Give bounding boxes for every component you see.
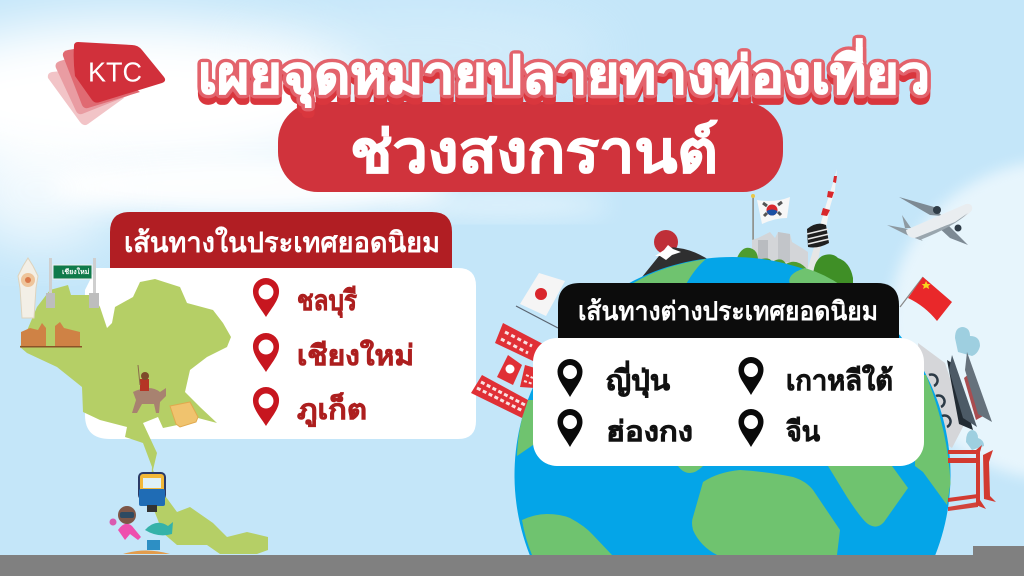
- international header: เส้นทางต่างประเทศยอดนิยม: [578, 296, 878, 326]
- logo text: KTC: [88, 56, 142, 88]
- title: เผยจุดหมายปลายทางท่องเที่ยว: [198, 46, 930, 115]
- label: Chiang Mai: เชียงใหม่: [297, 339, 414, 371]
- globe: [514, 257, 950, 555]
- domestic white card: [85, 268, 476, 439]
- landmark: N Seoul Tower: [806, 169, 853, 284]
- international white card: [533, 338, 924, 466]
- icon: Chiang Mai lantern tower: [18, 258, 38, 318]
- ground strip: [0, 546, 1024, 576]
- flag: China: [900, 277, 952, 321]
- icon: diver and sea life: [110, 506, 173, 554]
- label: Japan: ญี่ปุ่น: [606, 360, 670, 398]
- label: Hong Kong: ฮ่องกง: [606, 416, 693, 447]
- icon: black pin: [738, 357, 764, 395]
- panel: international routes: [533, 283, 924, 466]
- flag: South Korea: [751, 194, 790, 246]
- panel: domestic routes: [85, 212, 476, 439]
- flag: Japan: [516, 273, 565, 328]
- arches on wall: [929, 374, 951, 427]
- landmark: Korean palace: [947, 327, 992, 450]
- icon: Chiang Mai sign: [46, 258, 99, 308]
- icon: brick wall gate: [20, 322, 82, 348]
- icon: black pin: [557, 409, 583, 447]
- map of Thailand: [18, 258, 268, 554]
- domestic header: [110, 212, 452, 268]
- icon: red pin: [253, 333, 279, 372]
- icon: ancient temple tile: [170, 402, 198, 427]
- icon: tuk tuk: [139, 473, 165, 512]
- wall behind globe: [918, 343, 965, 448]
- logo card: [74, 42, 165, 103]
- icon: Chiang Mai sign: เชียงใหม่: [62, 267, 90, 276]
- subtitle pill: [278, 102, 783, 192]
- globe continents: [517, 259, 950, 555]
- icon: red pin: [253, 278, 279, 317]
- icon: black pin: [557, 359, 583, 397]
- landmark: Seoul skyline: [737, 232, 808, 274]
- pin list: domestic: [253, 278, 414, 427]
- landmark: Mount Fuji: [638, 230, 712, 284]
- label: China: จีน: [785, 416, 820, 447]
- icon: airplane: [887, 197, 972, 245]
- domestic header: เส้นทางในประเทศยอดนิยม: [124, 226, 440, 258]
- label: Phuket: ภูเก็ต: [297, 392, 367, 427]
- landmark: red torii gate: [948, 445, 996, 511]
- label: Chonburi: ชลบุรี: [297, 285, 357, 318]
- label: South Korea: เกาหลีใต้: [786, 364, 893, 396]
- logo: KTC: [48, 42, 165, 125]
- international header: [558, 283, 899, 338]
- icon: red pin: [253, 387, 279, 426]
- icon: farmer on buffalo: [132, 365, 166, 413]
- landmark: Hong Kong buildings and flag: [471, 323, 545, 418]
- icon: black pin: [738, 409, 764, 447]
- subtitle text: ช่วงสงกรานต์: [350, 119, 718, 185]
- title: เผยจุดหมายปลายทางท่องเที่ยว: [198, 39, 930, 108]
- title: เผยจุดหมายปลายทางท่องเที่ยว: [198, 39, 930, 108]
